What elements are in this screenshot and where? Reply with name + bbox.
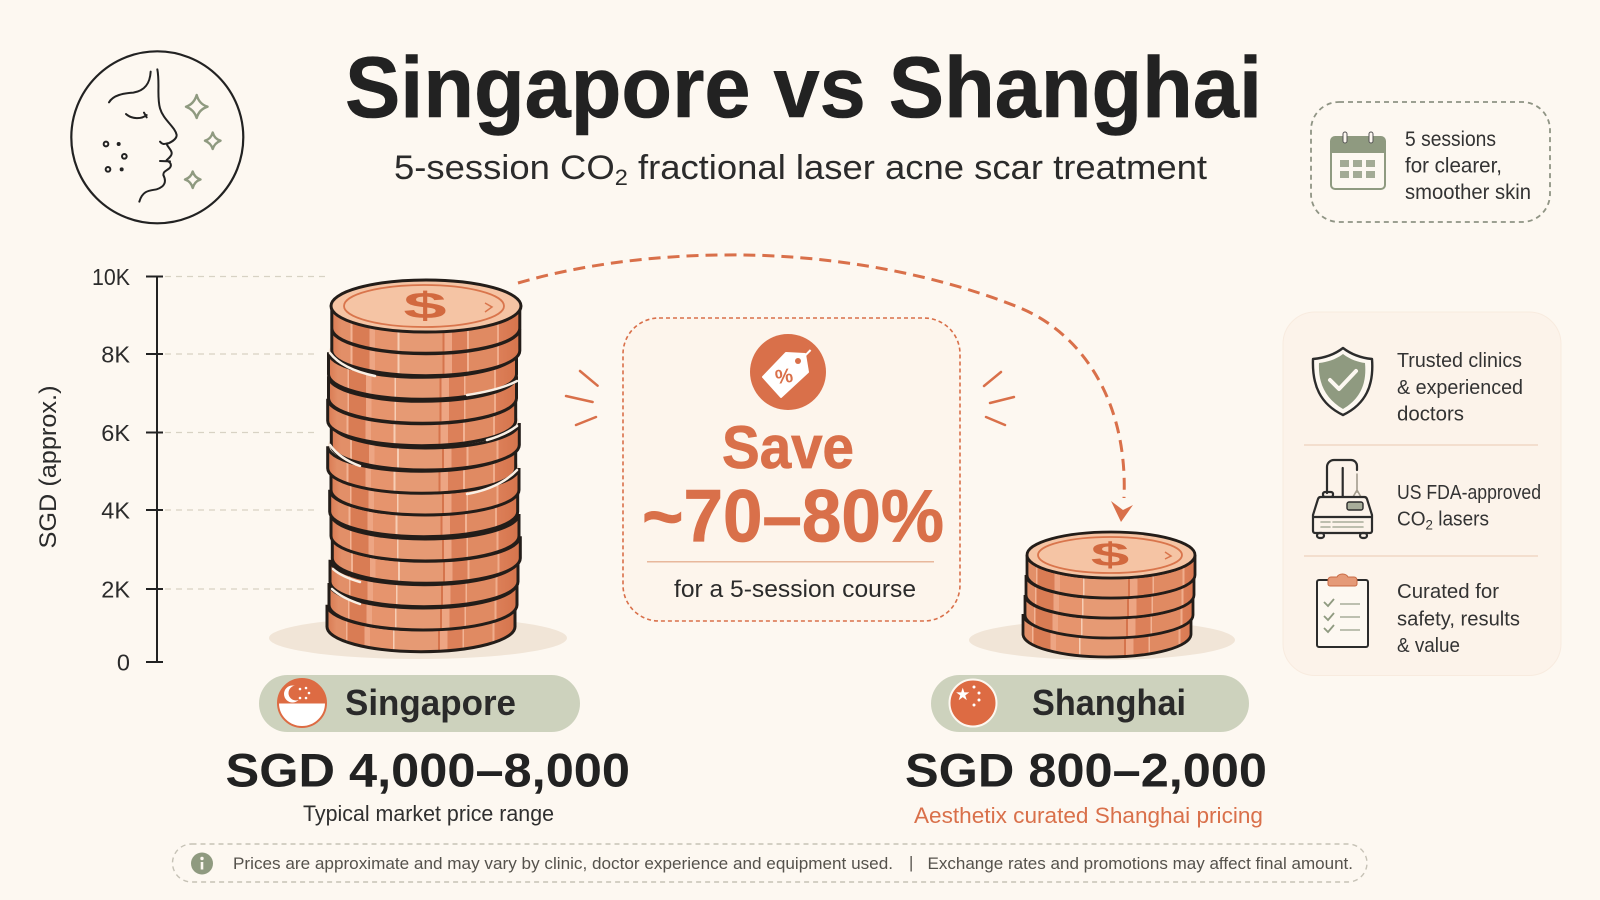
subtitle: 2 [615,165,628,190]
coin stack: Singapore: $ [403,285,447,326]
callout text: for clearer, [1405,154,1502,178]
text: trusted clinics: & experienced [1397,376,1523,399]
price: Singapore: SGD 4,000–8,000 [226,744,630,796]
axis: SGD price scale: 4K [101,498,130,524]
label: Shanghai [931,675,1249,732]
subtitle: 5-session CO [394,149,600,187]
price note: Shanghai: Aesthetix curated Shanghai pricing [914,803,1263,828]
icon: laser machine [1313,460,1372,538]
footer disclaimer [172,844,1367,882]
icon: China flag [950,680,996,726]
disclaimer text: Exchange rates and promotions may affect final amount. [928,855,1353,873]
coin stack: Singapore [327,280,521,652]
shadow: Shanghai stack [969,620,1235,660]
panel: savings [623,318,960,621]
icon: shield [1313,348,1372,415]
arrow: Singapore to Shanghai [518,255,1133,522]
label: Singapore [259,675,580,732]
title: Singapore vs Shanghai [345,40,1262,136]
text: curated: Curated for [1397,580,1499,603]
axis: SGD price scale: 2K [101,576,130,602]
label text: Singapore [345,682,516,723]
disclaimer text: | [909,854,913,872]
callout text: 5 sessions [1405,128,1496,151]
shadow: Singapore stack [269,617,567,659]
callout: 5 sessions [1311,102,1550,222]
text: curated: & value [1397,634,1460,657]
icon: Singapore flag [278,679,326,727]
text: trusted clinics [1397,349,1523,426]
disclaimer text [233,854,1353,873]
text: FDA lasers: US FDA-approved [1397,482,1541,504]
text: trusted clinics: doctors [1397,402,1464,426]
text: FDA lasers: CO [1397,508,1427,530]
savings note: for a 5-session course [674,576,916,603]
icon: calendar [1331,132,1385,189]
callout text: smoother skin [1405,181,1531,204]
text: FDA lasers [1397,482,1541,532]
disclaimer text: Prices are approximate and may vary by clinic, doctor experience and equipment used. [233,855,893,873]
text: curated [1397,580,1520,657]
axis: SGD price scale: 10K [92,264,130,290]
icon: China flag: ★ [955,685,970,704]
text: FDA lasers: 2 [1426,516,1433,532]
coin stack: Shanghai [1023,532,1195,657]
burst lines: left [566,371,598,425]
icon: face with acne spots and sparkles [71,51,243,223]
callout text [1405,128,1531,204]
icon: clipboard checklist [1317,574,1368,647]
subtitle: fractional laser acne scar treatment [628,149,1208,187]
burst lines: right [984,372,1014,425]
text: FDA lasers: lasers [1433,508,1489,530]
text: trusted clinics: Trusted clinics [1397,349,1522,372]
price note: Singapore: Typical market price range [303,801,554,826]
coin stack: Shanghai: $ [1091,536,1129,573]
text: curated: safety, results [1397,608,1520,630]
save headline: Save [722,414,854,481]
icon: price tag: % [774,365,795,389]
axis: SGD price scale: SGD (approx.) [35,386,62,548]
label text: Shanghai [1032,682,1186,723]
savings percentage: ~70–80% [642,475,944,558]
icon: price tag [750,334,826,410]
price: Shanghai: SGD 800–2,000 [905,744,1267,796]
axis: SGD price scale: 6K [101,420,130,446]
axis: SGD price scale [35,264,329,676]
icon: info [191,852,213,874]
axis: SGD price scale: 8K [101,342,130,368]
panel: trust points [1283,312,1561,676]
axis: SGD price scale: 0 [117,650,130,676]
